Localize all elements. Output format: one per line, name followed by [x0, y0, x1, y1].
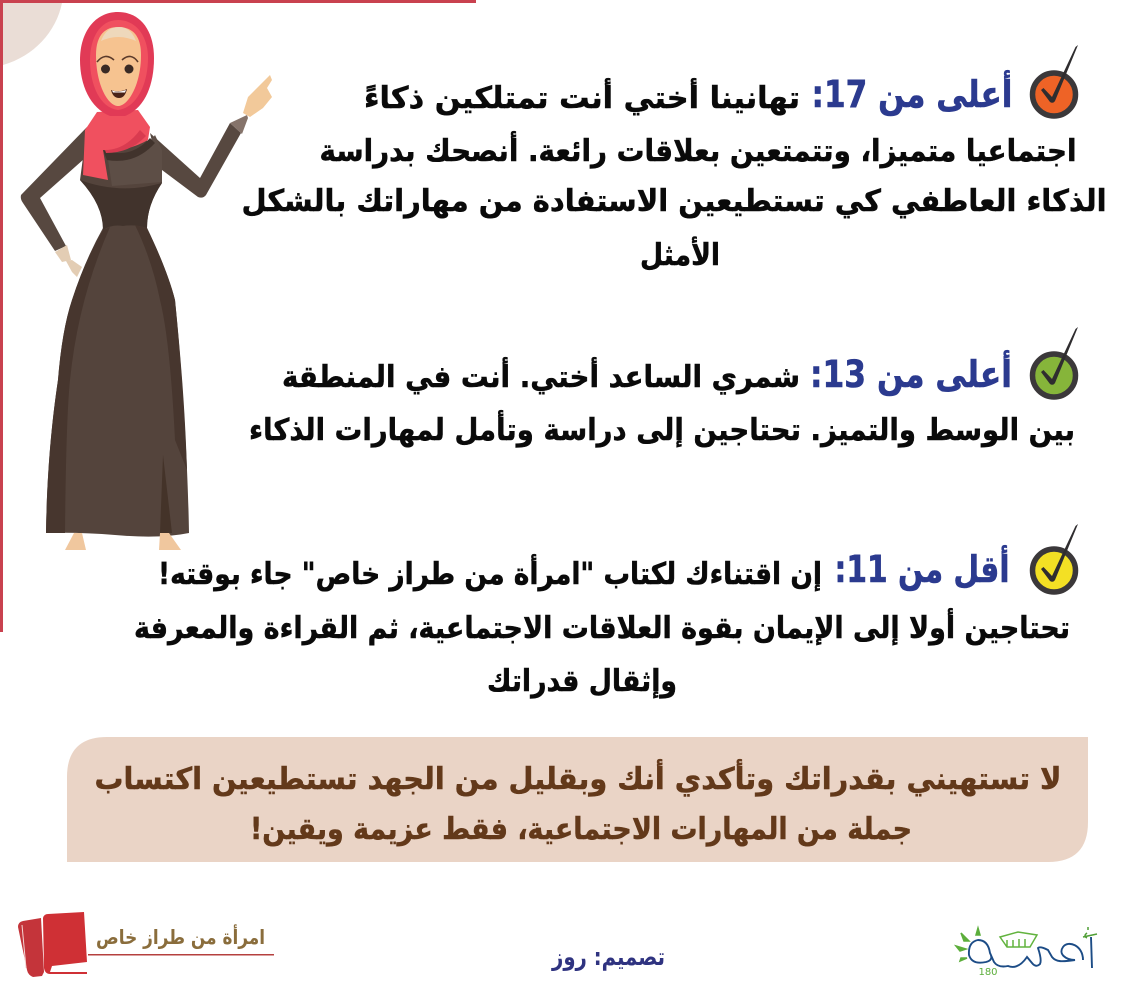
brand name: امرأة من طراز خاص	[96, 923, 265, 949]
logo number: 180	[978, 967, 998, 978]
logo wordmark	[969, 937, 1092, 968]
left cuff and hand	[55, 245, 82, 277]
check icon: green	[1032, 327, 1078, 397]
heading: below 11: أقل من 11:	[834, 545, 1010, 591]
icon: red books	[18, 912, 87, 977]
section 2	[249, 327, 1078, 448]
text line: شمري الساعد أختي. أنت في المنطقة	[282, 357, 800, 395]
logo leaves	[956, 928, 980, 961]
callout line 1: لا تستهيني بقدراتك وتأكدي أنك وبقليل من الجهد تستطيعين اكتساب	[94, 759, 1062, 797]
check icon: yellow	[1032, 524, 1078, 592]
right hand	[243, 75, 272, 117]
section 1	[242, 45, 1106, 273]
hijab inner rim	[90, 20, 148, 110]
text line: اجتماعيا متميزا، وتتمتعين بعلاقات رائعة. أنصحك بدراسة	[320, 131, 1076, 169]
eyes	[101, 64, 110, 74]
logo hamza	[1083, 927, 1097, 938]
right cuff	[230, 115, 248, 134]
section 3	[134, 524, 1078, 699]
dress shading	[80, 180, 162, 230]
text line: وإثقال قدراتك	[487, 664, 677, 699]
heading: above 13: أعلى من 13:	[810, 350, 1012, 396]
right arm	[150, 123, 241, 198]
text line: إن اقتناءك لكتاب "امرأة من طراز خاص" جاء بوقته!	[158, 554, 822, 592]
face	[96, 27, 141, 106]
callout line 2: جملة من المهارات الاجتماعية، فقط عزيمة ويقين!	[250, 812, 912, 847]
corner decoration	[2, 2, 476, 632]
hijab	[80, 12, 154, 116]
check icon: orange	[1032, 45, 1078, 116]
dress	[46, 130, 189, 537]
mouth	[111, 89, 127, 98]
brand: book logo	[18, 912, 274, 977]
left arm	[21, 127, 87, 251]
heading: above 17: أعلى من 17:	[812, 70, 1012, 116]
brows	[97, 56, 138, 62]
scarf	[83, 110, 150, 180]
text line: الأمثل	[640, 236, 720, 273]
feet	[65, 533, 181, 550]
logo bridge	[1000, 932, 1037, 947]
hair	[101, 27, 136, 41]
illustration: woman in hijab pointing	[21, 12, 272, 550]
logo: Osbouha	[956, 927, 1097, 978]
text line: الذكاء العاطفي كي تستطيعين الاستفادة من مهاراتك بالشكل	[242, 184, 1106, 219]
designer credit: تصميم: روز	[551, 943, 665, 971]
rule	[88, 954, 274, 956]
callout panel	[67, 737, 1088, 862]
text line: تهانينا أختي أنت تمتلكين ذكاءً	[364, 78, 800, 116]
